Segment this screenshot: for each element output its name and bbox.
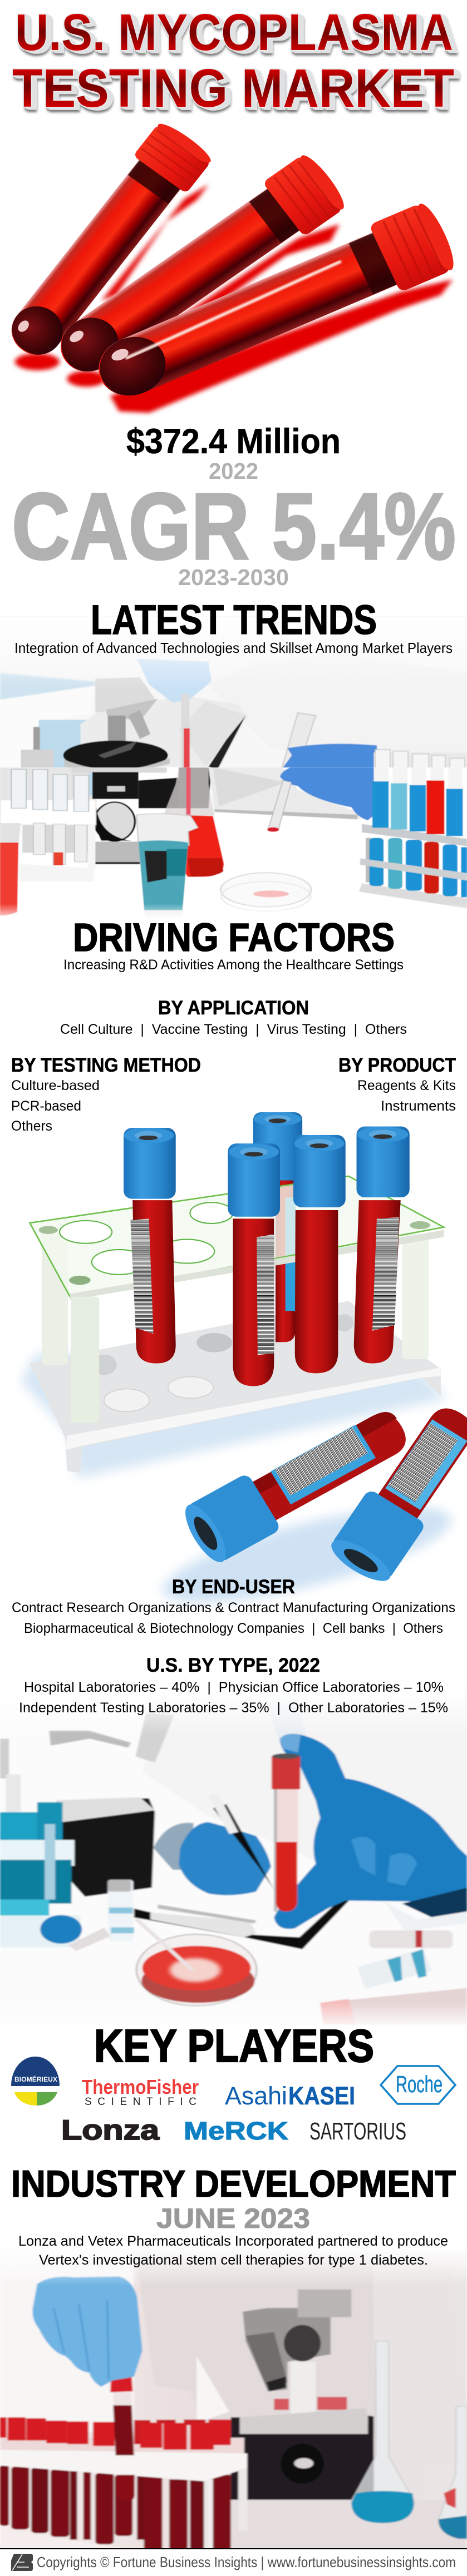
tube 1 [0,119,215,369]
segment: by testing method: Culture-based [11,1078,100,1093]
development description: Vertex's investigational stem cell therapies for type 1 diabetes. [39,2252,428,2268]
segment: by product [338,1054,456,1114]
segment: u.s. by type: U.S. BY TYPE, 2022 [146,1654,320,1676]
big gloved hand [274,1734,467,1929]
lying tube 1 [178,1398,418,1568]
rack base [30,1301,441,1473]
tubes in rack [0,2465,231,2551]
right glove and test tube [280,767,376,820]
footer [0,2548,467,2576]
image: rack of blood tubes with blue caps [21,1112,467,1622]
segment: by testing method [11,1054,201,1134]
segment: by application: BY APPLICATION [158,997,309,1019]
lower lab scene [0,767,467,929]
round blue flask [40,1915,82,1944]
left rack with empty tubes [0,800,96,825]
plate [30,1176,444,1300]
white rack bar [0,2450,247,2481]
logo: Roche [381,2066,455,2104]
tube 4 [293,1135,346,1373]
image: gloved hand picking blood tube from rack [0,2247,467,2551]
petri dish [136,1934,257,2006]
forecast period: 2023-2030 [178,564,289,590]
table [231,2500,467,2550]
tube shadows [15,185,453,413]
segment: u.s. by type [19,1654,448,1716]
logo: Lonza: Lonza [61,2114,160,2146]
teal beaker [136,814,198,845]
segment: by application: Cell Culture | Vaccine Testing | Virus Testing | Others [60,1022,407,1037]
development date: JUNE 2023 [156,2203,310,2234]
base year: 2022 [209,458,258,484]
segment: by product: BY PRODUCT [338,1054,456,1076]
soft shadow under lying tubes [154,1488,459,1622]
logo: Roche: Roche [396,2071,443,2097]
segment: by product: Instruments [381,1098,456,1114]
development description: Lonza and Vetex Pharmaceuticals Incorporated partnered to produce [18,2233,448,2249]
upper lab scene [0,658,467,767]
logo: bioMerieux: BIOMÉRIEUX [14,2075,57,2083]
back glass and caps [0,2418,244,2461]
image: three red blood test tubes [0,119,460,413]
image: gloved hand holding blood tube [0,1691,467,2030]
logo: Asahi Kasei: Asahi [225,2082,287,2110]
segment: by testing method: BY TESTING METHOD [11,1054,201,1076]
logo: Asahi Kasei: KASEI [288,2082,355,2110]
logo: Asahi Kasei [225,2082,355,2110]
segment: by end-user: Contract Research Organizations & Contract Manufacturing Organizations [12,1600,455,1616]
development description [18,2233,448,2268]
tube 2 [45,151,350,388]
tube 3 [228,1143,280,1386]
driving factors description: Increasing R&D Activities Among the Healthcare Settings [63,957,404,973]
microscope [243,2308,331,2391]
blue flask [351,2341,414,2523]
erlenmeyer flask [163,767,214,816]
market size value: $372.4 Million [126,422,341,461]
segment: by application [60,997,407,1037]
rack shadow [21,1354,447,1478]
clipboard [134,1899,350,1949]
logo: Thermo Fisher Scientific [82,2075,199,2108]
right rack of tubes [359,767,467,908]
back tube [253,1112,302,1342]
small vials [108,1880,133,1941]
front left post [71,1297,99,1423]
image: lab scientist with microscope and coloured tubes [0,658,467,916]
logo: Thermo Fisher Scientific: ThermoFisher [82,2075,199,2098]
writing hand [154,1823,194,1870]
tube 1 [124,1128,176,1364]
heading: driving factors: DRIVING FACTORS [73,916,395,960]
tube in hand [274,1789,298,1843]
mirror [95,802,135,841]
tube 5 [354,1127,410,1364]
logo: Sartorius: SARTORIUS [309,2118,406,2145]
lying tube 2 [325,1396,467,1588]
right flask [439,2406,467,2539]
rack back posts [42,1234,429,1365]
title [12,3,454,118]
segment: by testing method: PCR-based [11,1098,81,1114]
segment: u.s. by type: Hospital Laboratories – 40% | Physician Office Laboratories – 10% [24,1680,444,1695]
heading: key players: KEY PLAYERS [94,2020,374,2072]
icon: Fortune Business Insights logo [11,2554,33,2571]
segment: u.s. by type: Independent Testing Laboratories – 35% | Other Laboratories – 15% [19,1700,448,1716]
logo: Thermo Fisher Scientific: SCIENTIFIC [85,2096,196,2108]
black box [57,1799,155,1896]
logo: Merck: MeRCK [184,2117,289,2145]
heading: latest trends: LATEST TRENDS [91,597,377,643]
petri dish [221,873,311,907]
segment: by testing method: Others [11,1118,52,1134]
lifted tube [113,2392,134,2456]
segment: by end-user: Biopharmaceutical & Biotechnology Companies | Cell banks | Others [24,1621,443,1636]
tube 3 [85,200,460,413]
segment: by end-user [12,1576,455,1636]
teal rack [0,1811,39,1841]
segment: by end-user: BY END-USER [172,1576,295,1598]
logo: bioMerieux [11,2057,60,2106]
pale blue glove [32,2276,142,2387]
red glass at left edge [0,823,21,845]
segment: by product: Reagents & Kits [357,1078,456,1093]
right vials [370,1930,453,1948]
